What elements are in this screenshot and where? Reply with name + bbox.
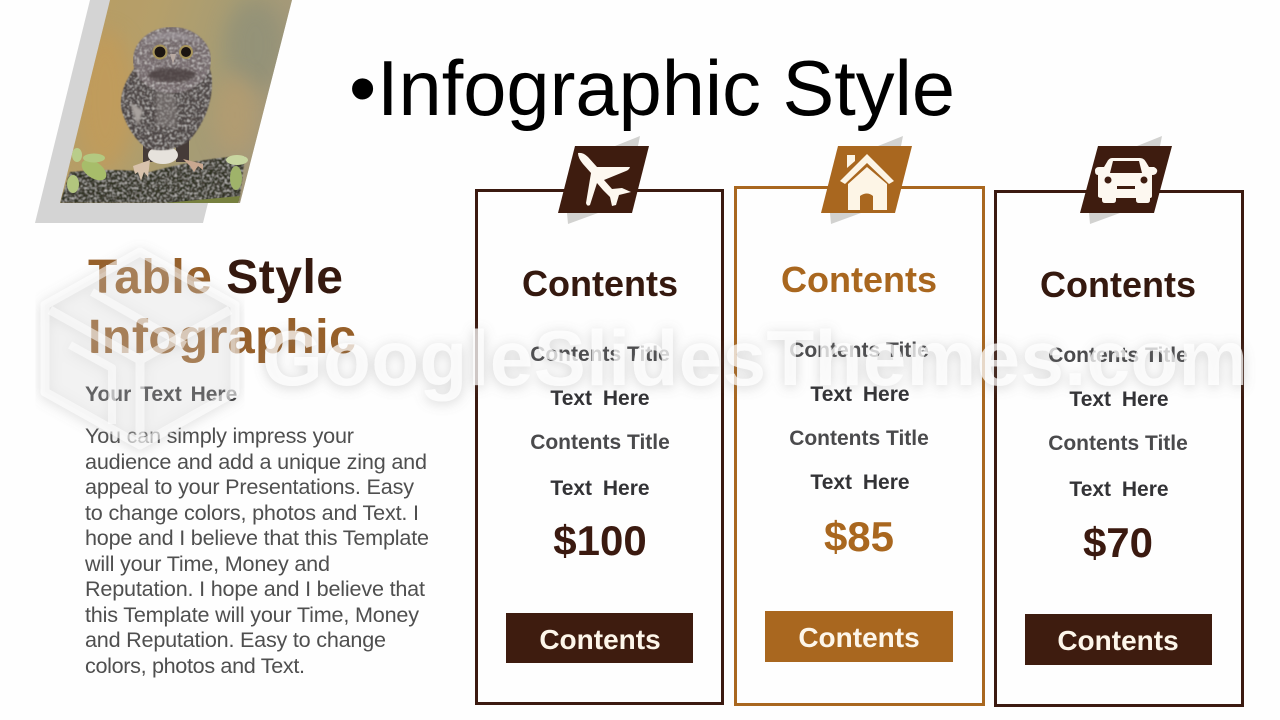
card 2 price: $85 <box>824 513 894 560</box>
card 2 button: Contents <box>798 622 920 653</box>
heading: table style infographic <box>88 251 356 364</box>
pricing card 1: Text Here <box>550 387 650 410</box>
body paragraph: this Template will your Time, Money <box>85 602 419 627</box>
icon: car badge <box>1080 136 1172 224</box>
card 1 price: $100 <box>553 517 647 564</box>
card 1 border <box>476 190 722 704</box>
body <box>121 58 212 150</box>
body paragraph: to change colors, photos and Text. I <box>85 500 419 525</box>
card 2 button <box>765 611 953 662</box>
card 3 rows: Contents Title <box>1048 344 1188 367</box>
pricing card 1: Text Here <box>550 477 650 500</box>
body paragraph: audience and add a unique zing and <box>85 449 427 474</box>
watermark: site name: GoogleSlidesThemes.com <box>262 314 1248 402</box>
card 1 heading: Contents <box>522 263 678 304</box>
feet <box>133 160 150 181</box>
card 3 heading: Contents <box>1040 264 1196 305</box>
pricing card 1: Contents Title <box>530 431 670 454</box>
pricing card 2: Text Here <box>810 383 910 406</box>
pricing card 2 <box>736 136 984 704</box>
pricing card 2: Contents Title <box>789 427 929 450</box>
icon: house badge <box>821 136 912 224</box>
title: Infographic Style <box>377 46 955 132</box>
branch <box>60 156 245 203</box>
body paragraph: will your Time, Money and <box>84 551 330 576</box>
card 3 border <box>996 192 1242 706</box>
pricing card 3: Contents Title <box>1048 432 1188 455</box>
body paragraph: colors, photos and Text. <box>85 653 305 678</box>
card 2 border <box>736 188 984 704</box>
card 1 button: Contents <box>539 624 661 655</box>
watermark: hexagon logo <box>45 252 235 445</box>
body paragraph: hope and I believe that this Template <box>85 525 429 550</box>
subheading: Your Text Here <box>85 383 237 406</box>
card 3 button <box>1025 614 1212 665</box>
icon: airplane badge <box>558 136 649 224</box>
card 1 button <box>506 613 693 663</box>
eyes <box>152 44 168 60</box>
head <box>133 27 211 93</box>
card 3 price: $70 <box>1083 519 1153 566</box>
legs <box>143 144 154 162</box>
heading: table style infographic: Infographic <box>88 310 356 364</box>
pricing card 3: Text Here <box>1069 388 1169 411</box>
card 2 heading: Contents <box>781 259 937 300</box>
card 1 rows: Contents Title <box>530 343 670 366</box>
photo frame: grey parallelogram with owl <box>35 0 292 223</box>
body paragraph: appeal to your Presentations. Easy <box>85 474 414 499</box>
pricing card 3: Text Here <box>1069 478 1169 501</box>
pricing card 2: Text Here <box>810 471 910 494</box>
leaves <box>82 160 106 180</box>
body paragraph: and Reputation. Easy to change <box>85 627 386 652</box>
pricing card 1 <box>476 136 722 704</box>
body paragraph: Reputation. I hope and I believe that <box>85 576 425 601</box>
body paragraph <box>84 423 429 678</box>
pricing card 3 <box>996 136 1242 706</box>
heading: table style infographic: Table Style <box>88 251 343 304</box>
body paragraph: You can simply impress your <box>85 423 354 448</box>
title: • <box>349 46 376 132</box>
card 2 rows: Contents Title <box>789 339 929 362</box>
card 3 button: Contents <box>1057 625 1179 656</box>
